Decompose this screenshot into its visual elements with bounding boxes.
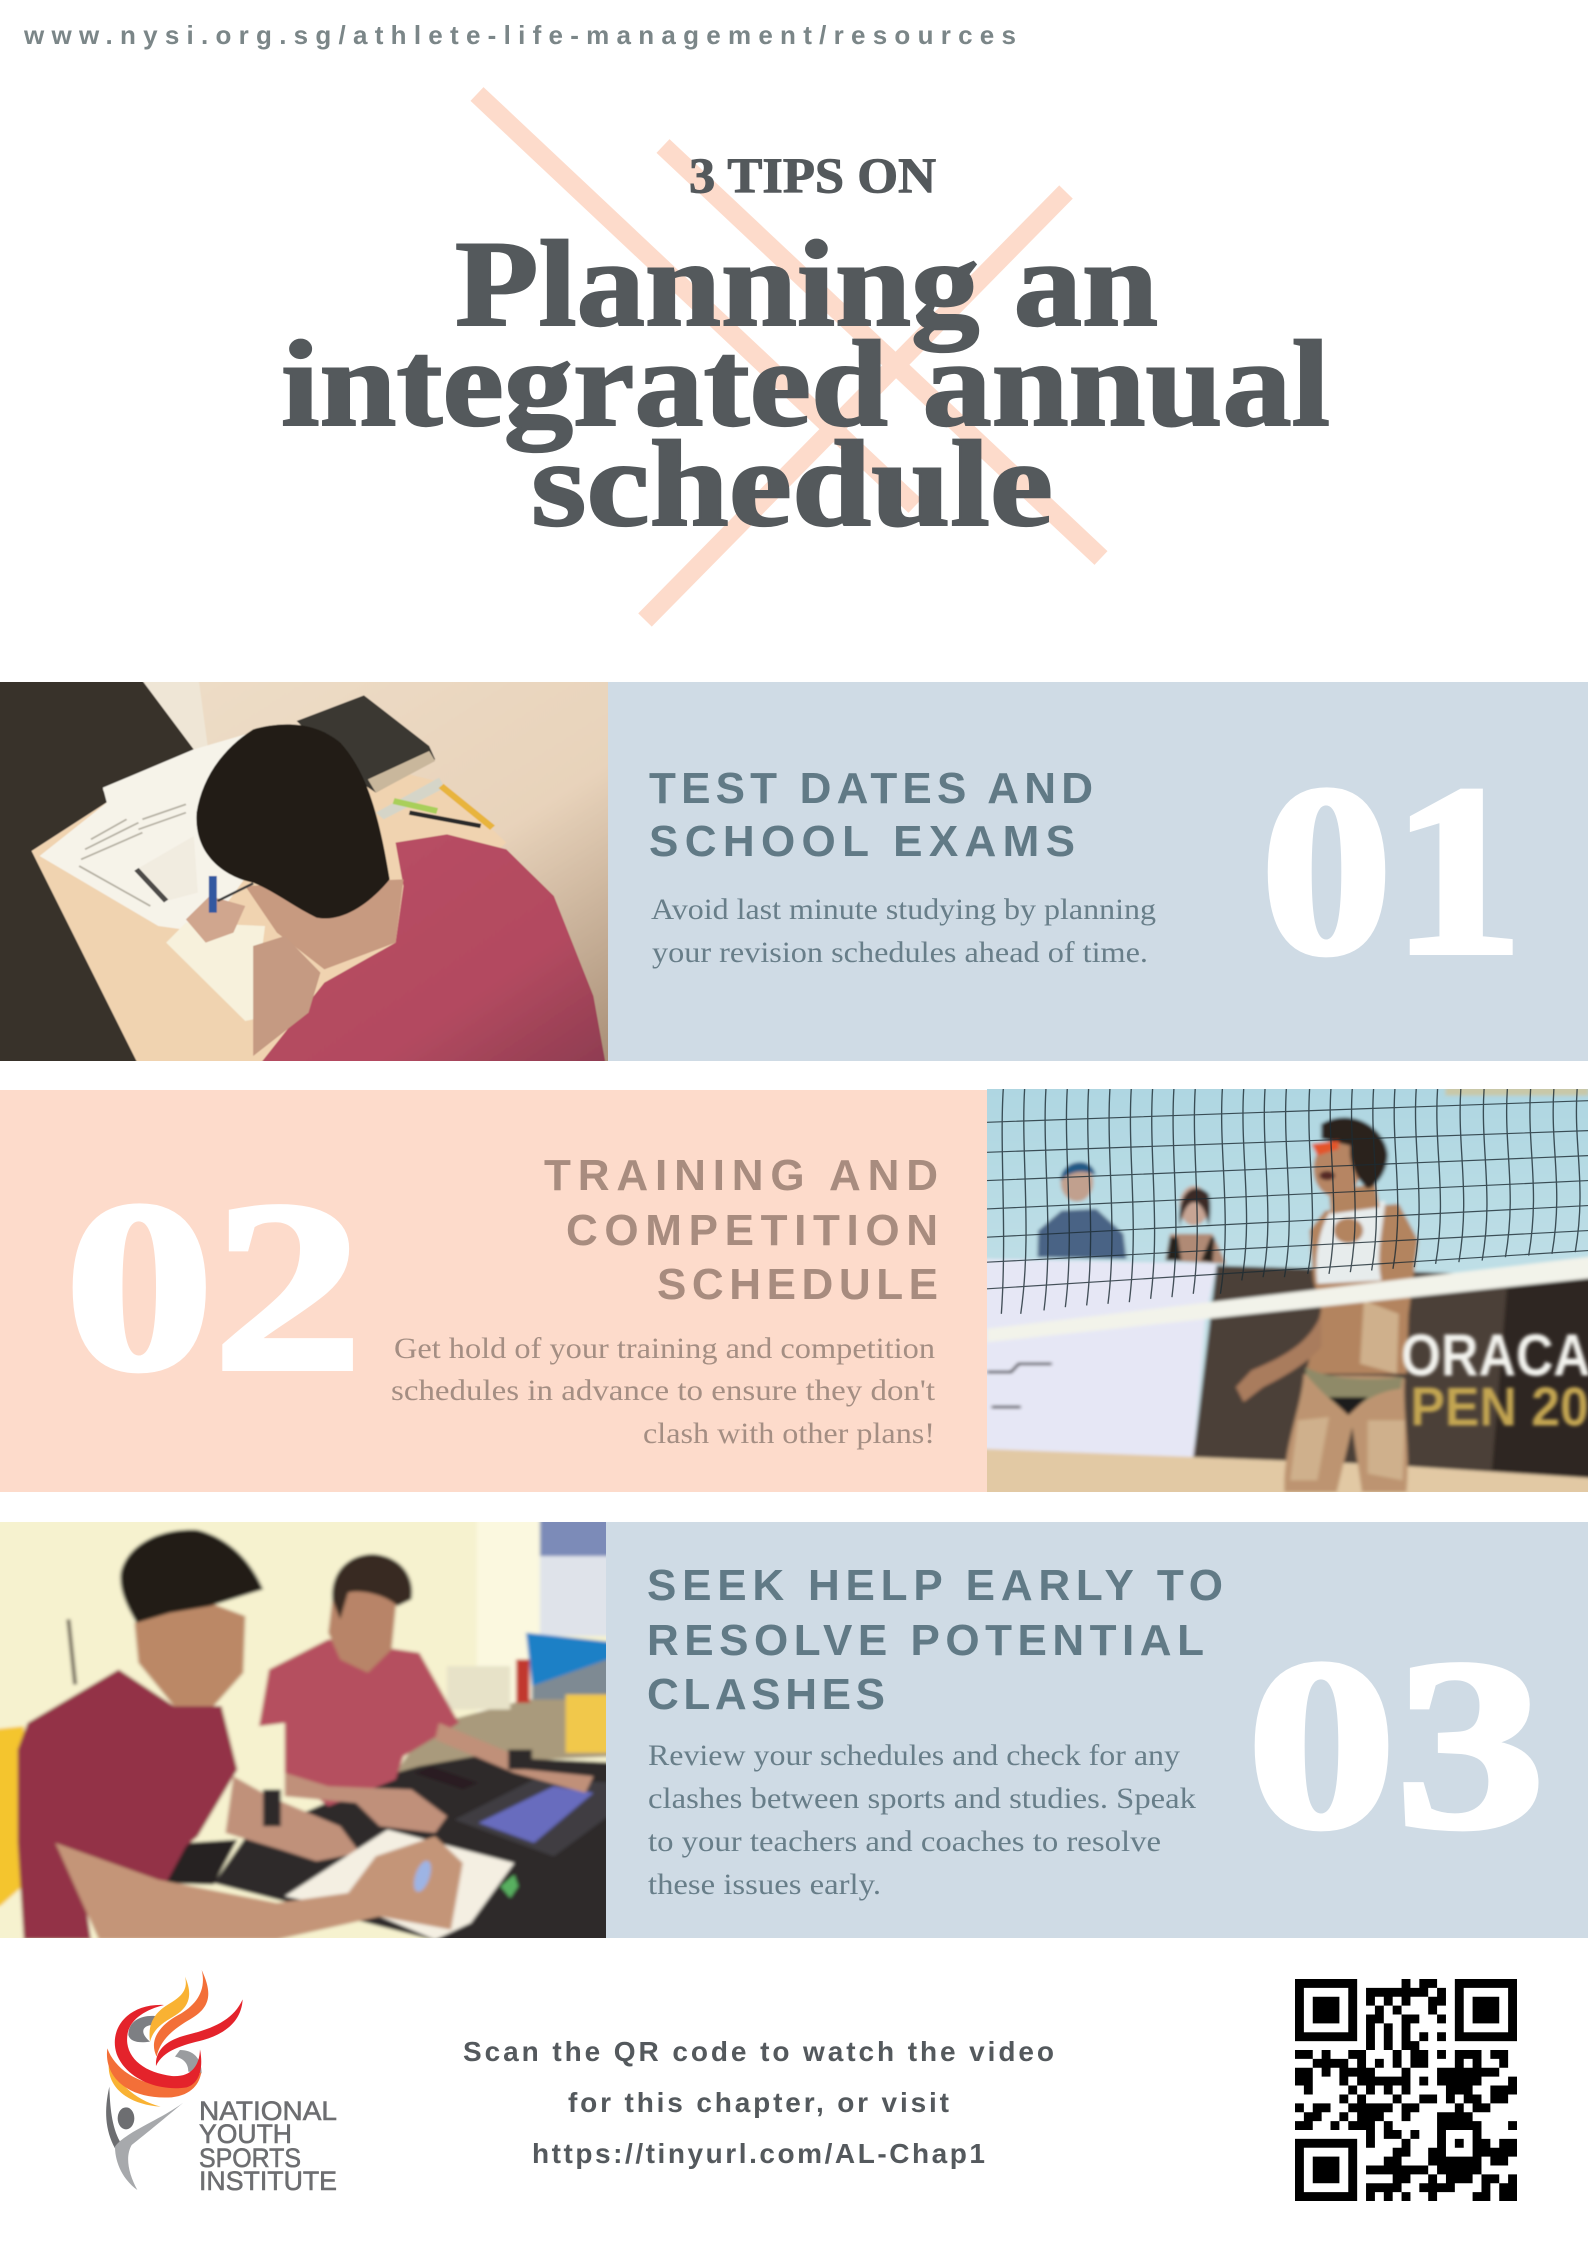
kicker: 3 tips on: 3 TIPS ON (689, 147, 936, 203)
volleyball net (987, 1089, 1588, 1314)
body text 3: to your teachers and coaches to resolve (648, 1825, 1161, 1858)
body text 2: schedules in advance to ensure they don't (391, 1374, 936, 1407)
title: Planning an (455, 215, 1158, 352)
panel 2 background (0, 1090, 987, 1492)
body text 2 (391, 1332, 936, 1450)
heading 2: TRAINING AND (544, 1151, 938, 1200)
icon: flame and figure (106, 1970, 243, 2190)
panel 1 background (608, 682, 1588, 1061)
heading 3: CLASHES (647, 1670, 885, 1719)
panel: tip 1 (0, 673, 1588, 1073)
number 02: 02 (65, 1151, 362, 1421)
panel: tip 2 (0, 1081, 1588, 1500)
photo: student writing at a desk (0, 682, 608, 1061)
heading 1 (649, 764, 1093, 866)
number 01: 01 (1261, 735, 1523, 1005)
logo wordmark: NATIONAL (199, 2096, 337, 2126)
heading 2 (544, 1151, 938, 1309)
title: integrated annual (281, 315, 1330, 452)
website url: www.nysi.org.sg/athlete-life-management/resources (23, 20, 1016, 50)
logo wordmark (199, 2096, 337, 2196)
logo: National Youth Sports Institute (106, 1970, 337, 2196)
logo wordmark: INSTITUTE (199, 2166, 337, 2196)
call to action: https://tinyurl.com/AL-Chap1 (532, 2138, 985, 2169)
photo: beach volleyball player at the net (987, 1089, 1588, 1492)
call to action: Scan the QR code to watch the video (463, 2036, 1054, 2067)
body text 1: your revision schedules ahead of time. (652, 936, 1148, 969)
panel 3 background (606, 1522, 1588, 1938)
heading 2: SCHEDULE (657, 1260, 938, 1309)
call to action: for this chapter, or visit (568, 2087, 949, 2118)
body text 3: clashes between sports and studies. Speak (648, 1782, 1196, 1815)
photo: two athletes planning at a laptop (0, 1522, 606, 1938)
number 03: 03 (1247, 1609, 1545, 1879)
body text 2: clash with other plans! (643, 1417, 935, 1450)
heading 1: SCHOOL EXAMS (649, 817, 1075, 866)
heading 3 (647, 1561, 1223, 1719)
logo wordmark: SPORTS (199, 2143, 301, 2173)
heading 2: COMPETITION (566, 1206, 938, 1255)
QR code (1295, 1979, 1517, 2201)
body text 3 (648, 1739, 1196, 1901)
title (281, 215, 1330, 552)
logo wordmark: YOUTH (199, 2119, 292, 2149)
call to action (463, 2036, 1054, 2169)
body text 1 (651, 893, 1156, 969)
body text 1: Avoid last minute studying by planning (651, 893, 1156, 926)
heading 3: SEEK HELP EARLY TO (647, 1561, 1223, 1610)
decorative X behind the title (477, 94, 1101, 620)
title: schedule (531, 415, 1053, 552)
body text 2: Get hold of your training and competition (394, 1332, 935, 1365)
panel: tip 3 (0, 1509, 1588, 1950)
body text 3: these issues early. (648, 1868, 881, 1901)
heading 1: TEST DATES AND (649, 764, 1093, 813)
heading 3: RESOLVE POTENTIAL (647, 1616, 1204, 1665)
banner lettering in the photo (1401, 1322, 1588, 1437)
body text 3: Review your schedules and check for any (648, 1739, 1180, 1772)
